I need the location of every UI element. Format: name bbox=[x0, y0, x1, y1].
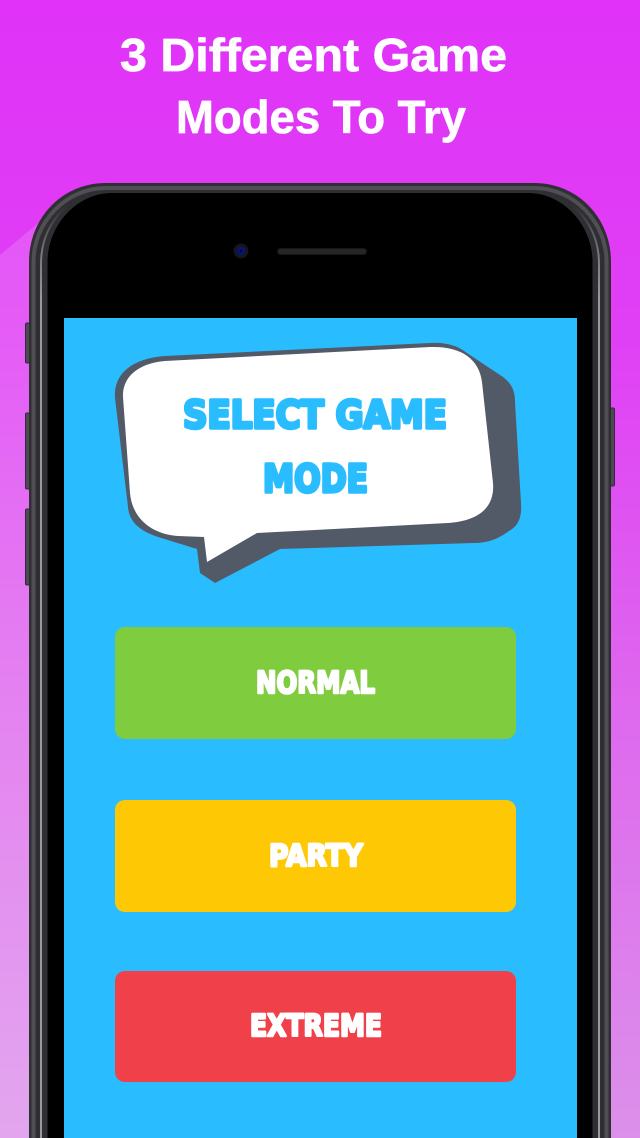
bubble heading: MODE bbox=[263, 457, 368, 501]
frame band bbox=[34, 188, 606, 1138]
frame side highlight bbox=[41, 206, 599, 1138]
screen bbox=[64, 318, 577, 1138]
speaker bbox=[278, 248, 366, 254]
bubble shadow bbox=[115, 343, 521, 583]
button: normal bbox=[115, 627, 516, 739]
side buttons bbox=[26, 323, 614, 585]
phone face bbox=[48, 193, 592, 1138]
bubble heading bbox=[183, 393, 447, 501]
speech bubble bbox=[115, 343, 521, 583]
button: extreme bbox=[115, 971, 516, 1082]
bubble heading: SELECT GAME bbox=[183, 393, 447, 437]
phone frame bbox=[29, 183, 611, 1138]
button: party bbox=[115, 800, 516, 912]
title bbox=[120, 29, 507, 143]
button: party: PARTY bbox=[269, 839, 364, 874]
button: extreme: EXTREME bbox=[250, 1009, 382, 1044]
title: Modes To Try bbox=[176, 91, 466, 143]
camera bbox=[234, 244, 248, 258]
bubble face bbox=[123, 347, 493, 562]
phone bbox=[26, 183, 614, 1138]
button: normal: NORMAL bbox=[256, 666, 375, 701]
title: 3 Different Game bbox=[120, 29, 507, 81]
